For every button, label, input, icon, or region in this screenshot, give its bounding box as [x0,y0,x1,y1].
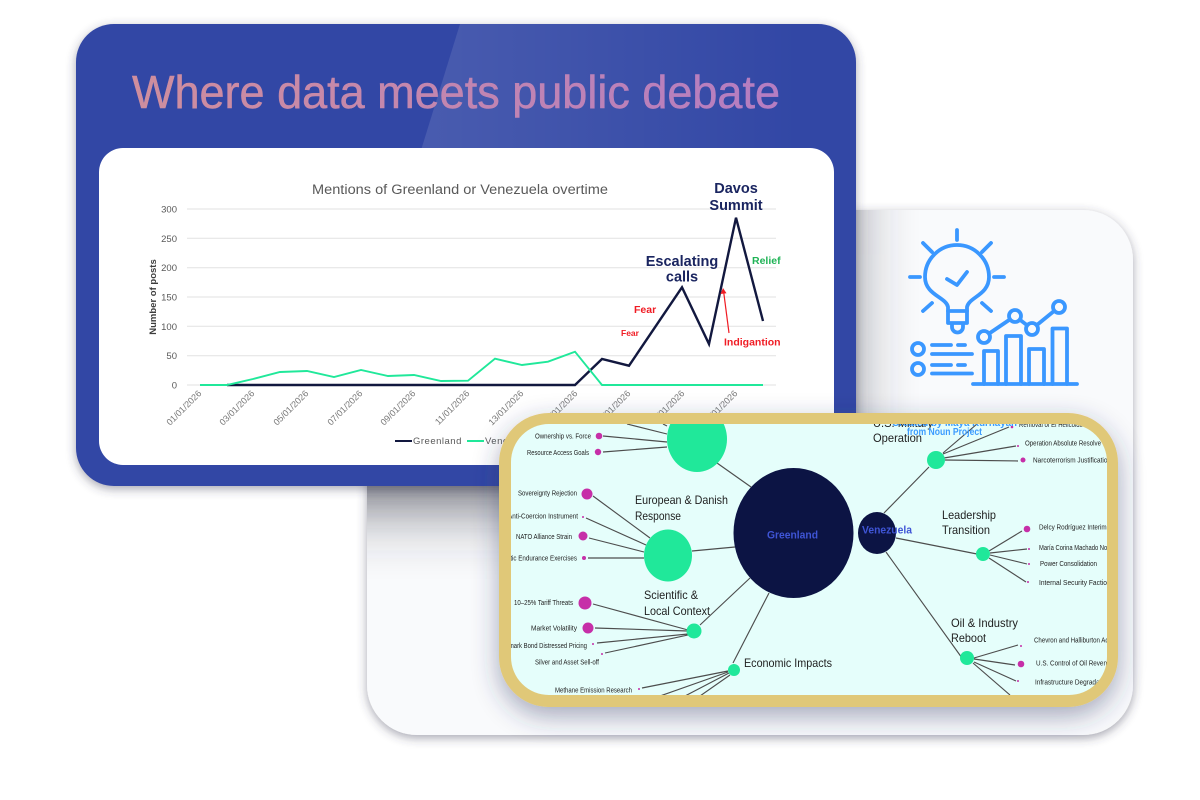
legend [395,436,534,447]
title: Where data meets public debate [132,66,780,118]
branch: Economic Impacts: Economic Impacts [744,656,832,670]
annotation: Escalating calls: Escalating [646,254,718,270]
line chart: 17/01/2026 [593,388,632,427]
line chart: Number of posts [148,259,159,335]
branch: Scientific and Local Context: Scientific & [644,588,698,602]
line chart: 11/01/2026 [433,388,471,427]
branch: Oil and Industry Reboot: U.S. Control of Oil Revenue [1036,660,1114,668]
legend: Venezuela [485,436,534,447]
branch: ownership cluster: Resource Access Goals [527,450,589,457]
annotation: Fear small: Fear [621,328,640,338]
annotation: Relief: Relief [752,255,781,267]
line chart: 19/01/2026 [647,388,686,427]
annotation: Davos Summit: Davos [714,181,758,197]
node: Venezuela [858,512,913,554]
panel: blue chart card [76,24,856,486]
branch: Scientific and Local Context: Market Volatility [531,626,577,632]
branch: European and Danish Response: Response [635,509,681,523]
branch: U.S. Military Operation: Operation Absolute Resolve [1025,440,1101,448]
line chart: 03/01/2026 [217,388,256,427]
icon: lightbulb with chart [910,230,1077,384]
line chart: 150 [161,292,177,304]
line chart: 07/01/2026 [325,388,364,427]
branch: Oil and Industry Reboot [952,618,1107,686]
branch: European and Danish Response: Anti-Coercion Instrument [508,514,578,520]
branch: Economic Impacts [556,658,832,692]
panel: back card [360,206,1140,745]
branch: Scientific and Local Context: 10–25% Tariff Threats [514,600,573,607]
branch: European and Danish Response [501,488,728,582]
line chart: 250 [161,234,177,245]
branch: European and Danish Response: Sovereignty Rejection [518,490,577,498]
line chart: 0 [172,380,177,392]
line chart: 05/01/2026 [271,388,310,427]
branch: European and Danish Response: European & Danish [635,493,728,507]
branch: Leadership Transition: Transition [942,523,990,537]
credit text [892,424,1016,437]
annotation: Fear: Fear [634,304,656,316]
branch: U.S. Military Operation: Operation [873,431,922,445]
line chart: 100 [161,322,177,333]
credit text: from Noun Project [907,426,982,438]
branch: Oil and Industry Reboot: Oil & Industry [951,616,1018,630]
branch: Scientific and Local Context: Local Context [644,604,711,618]
line chart: 15/01/2026 [540,388,579,427]
branch: Leadership Transition: Internal Security Factions [1039,580,1114,587]
branch: Leadership Transition [942,510,1107,586]
line chart: 13/01/2026 [486,388,525,427]
branch: U.S. Military Operation [874,424,1107,469]
branch: Oil and Industry Reboot: Infrastructure Degradation [1035,680,1110,686]
legend: Greenland [413,436,462,447]
series: Venezuela [200,352,763,385]
node: Venezuela: Venezuela [862,524,913,536]
annotation: Davos Summit: Summit [709,198,763,214]
series: Greenland [227,218,763,385]
branch: U.S. Military Operation: Removal of El Helicoide [1019,422,1083,429]
branch: European and Danish Response: Arctic Endurance Exercises [501,556,577,562]
branch: ownership cluster [528,424,727,472]
line chart: 09/01/2026 [378,388,417,427]
arrow: indignation [720,288,729,333]
branch: European and Danish Response: NATO Alliance Strain [516,534,572,541]
branch: Oil and Industry Reboot: Reboot [951,631,987,645]
annotation: Indigantion: Indigantion [724,336,781,348]
branch: Scientific and Local Context: Benchmark Bond Distressed Pricing [492,643,587,650]
branch: Economic Impacts: Methane Emission Research [555,688,632,694]
node: Greenland [734,468,854,598]
branch: Leadership Transition: Power Consolidation [1040,561,1097,568]
mind map [511,424,1107,695]
credit text: Created by Maya Kurnayah [892,417,1017,429]
line chart: 50 [166,351,177,362]
branch: Leadership Transition: María Corina Machado Nobel [1039,545,1115,552]
line chart: 300 [161,204,177,216]
line chart [148,204,776,427]
branch: Leadership Transition: Leadership [942,508,996,522]
branch: Scientific and Local Context: Silver and Asset Sell-off [535,660,599,666]
branch: Oil and Industry Reboot: Chevron and Halliburton Access [1034,638,1121,644]
line chart: 01/01/2026 [164,388,203,427]
branch: U.S. Military Operation: U.S. Military [873,416,933,430]
panel: mind map card [492,406,1135,707]
line chart: 21/01/2026 [700,388,739,427]
branch: Scientific and Local Context [511,590,710,664]
branch: ownership cluster: Ownership vs. Force [535,434,591,440]
branch: U.S. Military Operation: Narcoterrorism Justification [1033,458,1111,464]
node: Greenland: Greenland [767,530,818,542]
chart title: Mentions of Greenland or Venezuela overtime [312,182,608,197]
annotation: Escalating calls: calls [666,270,698,286]
branch: Leadership Transition: Delcy Rodríguez Interim President [1039,524,1135,532]
line chart: 200 [161,263,177,274]
panel: white chart area [99,148,834,465]
